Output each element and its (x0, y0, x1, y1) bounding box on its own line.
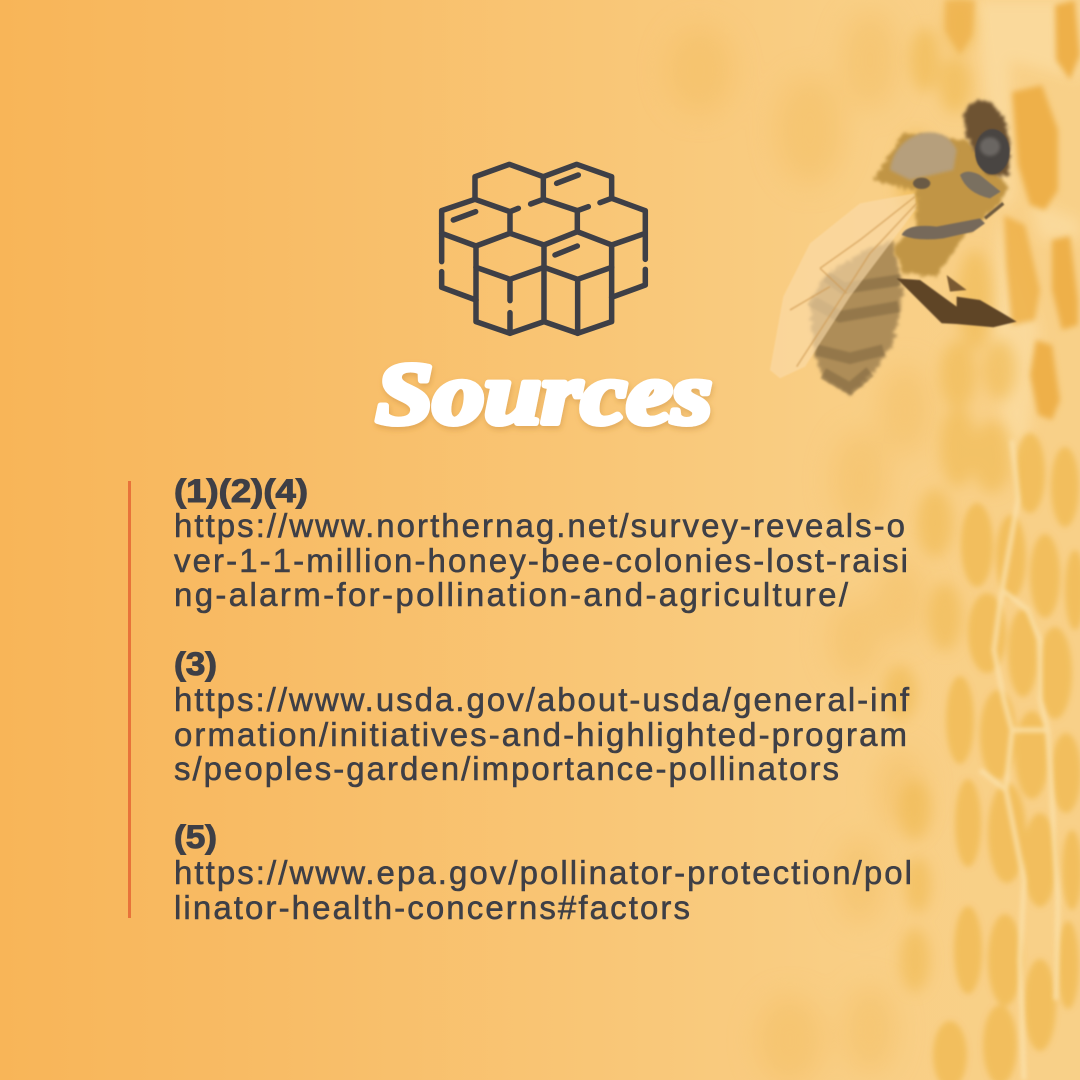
url 1: ver-1-1-million-honey-bee-colonies-lost-raisi (174, 542, 908, 579)
reference numbers 1 2 4: (1)(2)(4) (174, 473, 308, 509)
url 1: ng-alarm-for-pollination-and-agriculture/ (174, 576, 849, 613)
reference number 5: (5) (174, 819, 217, 855)
bee legs (897, 203, 1017, 327)
source block 3 (174, 819, 912, 926)
source block 1 (174, 473, 908, 613)
url 2: ormation/initiatives-and-highlighted-program (174, 716, 907, 753)
bee abdomen (810, 240, 903, 395)
bee wings (770, 193, 917, 378)
url 2: s/peoples-garden/importance-pollinators (174, 750, 839, 787)
url 3: linator-health-concerns#factors (174, 889, 690, 926)
source block 2 (174, 646, 910, 787)
title: Sources (376, 346, 712, 443)
url 3 (174, 854, 912, 926)
url 2: https://www.usda.gov/about-usda/general-inf (174, 681, 910, 718)
url 1 (174, 507, 908, 613)
bee head and eye (960, 101, 1010, 198)
url 1: https://www.northernag.net/survey-reveals-o (174, 507, 905, 544)
bee photo (770, 101, 1017, 395)
accent rule (128, 481, 131, 918)
url 3: https://www.epa.gov/pollinator-protection/pol (174, 854, 912, 891)
reference number 3: (3) (174, 646, 217, 682)
url 2 (174, 681, 910, 787)
bee thorax (873, 132, 1008, 277)
honeycomb photo background (666, 0, 1080, 1080)
icon: honeycomb (442, 164, 645, 333)
